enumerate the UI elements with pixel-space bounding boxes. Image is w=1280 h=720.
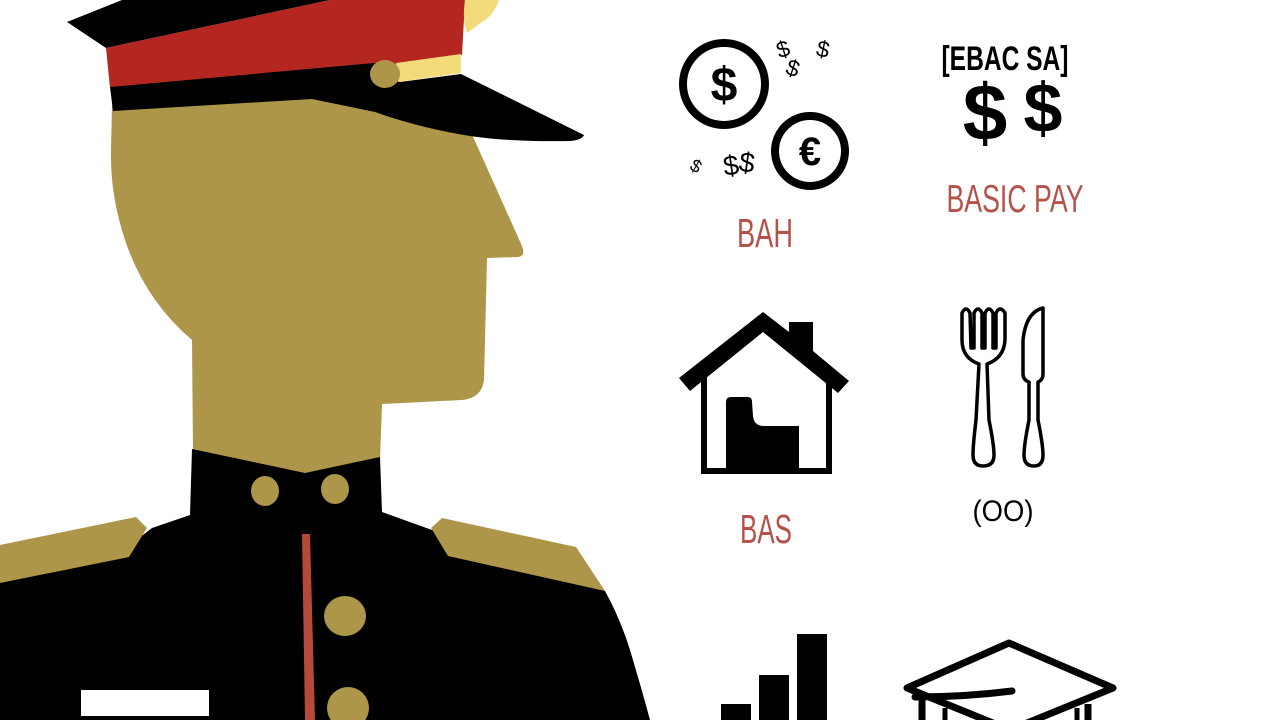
icon: coins: $ — [721, 149, 741, 182]
icon: basic pay dollars — [942, 40, 1068, 157]
icon: coins: $ — [711, 59, 738, 112]
label: (OO): (OO) — [972, 495, 1034, 528]
uniform body — [0, 449, 650, 720]
soldier figure — [0, 0, 650, 720]
icon: coins: $ — [687, 155, 705, 177]
label: BAH: BAH — [737, 210, 793, 256]
icon: coins: $ — [783, 54, 803, 82]
cap gold strap — [396, 54, 461, 82]
left epaulette — [0, 517, 147, 583]
icon: basic pay dollars: $ — [1024, 69, 1062, 147]
icon: coins: $ — [814, 35, 832, 63]
icon: basic pay dollars: $ — [963, 68, 1007, 157]
collar buttons — [251, 474, 349, 506]
red placket — [302, 534, 315, 720]
cap top — [67, 0, 330, 48]
cap black band — [110, 62, 584, 141]
icon: coins: € — [799, 130, 821, 174]
icon: bar chart — [721, 634, 827, 720]
face and neck — [111, 98, 523, 474]
icon: fork and knife — [962, 308, 1043, 466]
icon: coins: $ — [737, 146, 757, 179]
icon: house — [679, 312, 849, 471]
icon: graduation cap — [907, 643, 1113, 720]
tunic buttons — [324, 596, 369, 720]
cap red band — [106, 0, 465, 88]
cap button — [370, 60, 400, 88]
right epaulette — [431, 518, 605, 591]
label: BASIC PAY: BASIC PAY — [946, 178, 1084, 221]
name tag — [81, 690, 209, 716]
icon: basic pay dollars: [EBAC SA] — [942, 40, 1068, 78]
icon: coins — [683, 35, 845, 186]
cap gold crest — [464, 0, 499, 33]
icon: coins: $ — [773, 35, 793, 63]
label: BAS: BAS — [740, 506, 792, 552]
